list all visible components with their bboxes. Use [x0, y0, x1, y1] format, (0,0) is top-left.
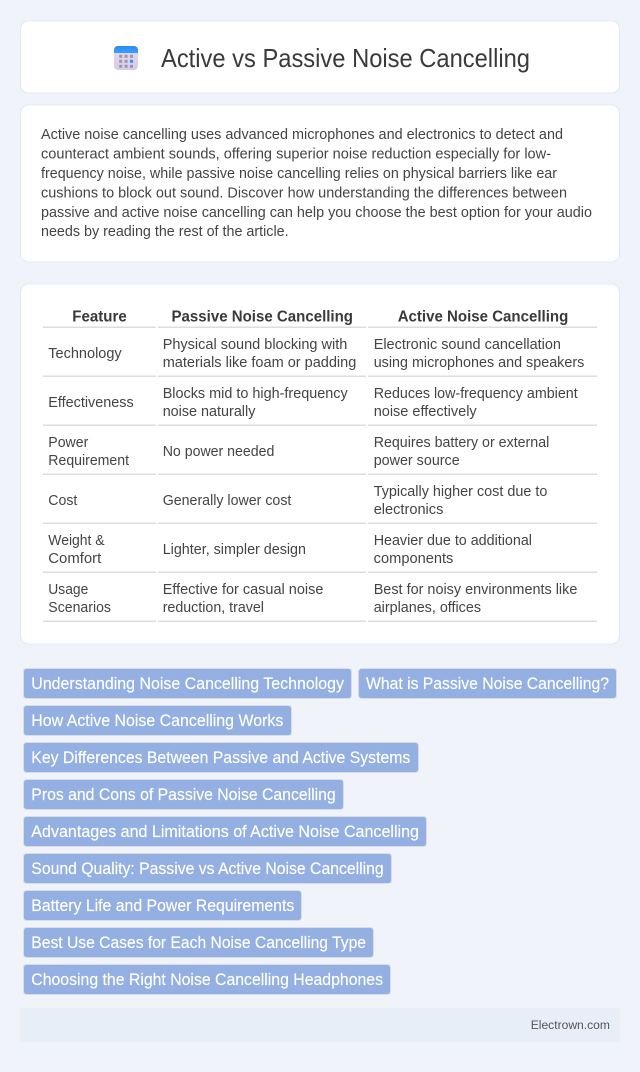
row: power requirement: Power	[48, 435, 88, 451]
row: cost: electronics	[374, 502, 443, 518]
tag: choosing: Choosing the Right Noise Cancelling Headphones	[31, 971, 383, 989]
panel: title card	[20, 21, 620, 93]
row: effectiveness: Effectiveness	[48, 395, 134, 411]
row: usage scenarios	[48, 582, 577, 616]
intro paragraph: Active noise cancelling uses advanced microphones and electronics to detect and	[41, 127, 563, 143]
tag: advantages: Advantages and Limitations of Active Noise Cancelling	[31, 823, 419, 841]
row: effectiveness: noise effectively	[374, 404, 477, 420]
tag: understanding	[24, 668, 352, 698]
tag: sound quality	[24, 854, 392, 884]
row: technology: Electronic sound cancellation	[374, 337, 561, 353]
row: effectiveness	[48, 386, 578, 420]
row: weight and comfort: Lighter, simpler design	[163, 542, 306, 558]
row: power requirement: power source	[374, 453, 460, 469]
row: power requirement: No power needed	[163, 444, 274, 460]
tag: differences: Key Differences Between Passive and Active Systems	[31, 749, 410, 767]
intro paragraph	[41, 127, 592, 240]
row: effectiveness: Reduces low-frequency ambient	[374, 386, 578, 402]
row: weight and comfort: Comfort	[48, 551, 101, 567]
row: power requirement: Requirement	[48, 453, 129, 469]
row: cost	[48, 484, 547, 518]
row: usage scenarios: airplanes, offices	[374, 600, 481, 616]
row: usage scenarios: reduction, travel	[163, 600, 264, 616]
tag: advantages	[24, 816, 426, 846]
tag: battery: Battery Life and Power Requirements	[31, 897, 294, 915]
table header: Passive Noise Cancelling	[172, 308, 353, 326]
tag: pros and cons: Pros and Cons of Passive Noise Cancelling	[31, 786, 336, 804]
row: technology: materials like foam or padding	[163, 355, 356, 371]
intro paragraph: needs by reading the rest of the article.	[41, 224, 289, 240]
panel: comparison table	[20, 284, 620, 644]
tag: battery	[24, 890, 302, 920]
row: usage scenarios: Usage	[48, 582, 88, 598]
row: technology: Technology	[48, 346, 122, 362]
row: power requirement	[48, 435, 549, 469]
table header	[72, 308, 568, 326]
tag: use cases: Best Use Cases for Each Noise Cancelling Type	[31, 934, 366, 952]
tag: differences	[24, 742, 418, 772]
row: technology: Physical sound blocking with	[163, 337, 347, 353]
row: effectiveness: Blocks mid to high-frequency	[163, 386, 348, 402]
tag: passive	[358, 668, 616, 698]
title: Active vs Passive Noise Cancelling	[161, 43, 530, 73]
tag: pros and cons	[24, 780, 344, 810]
row: cost: Cost	[48, 493, 77, 509]
row: usage scenarios: Scenarios	[48, 600, 111, 616]
intro paragraph: frequency noise, while passive noise cancelling relies on physical barriers like ear	[41, 166, 557, 182]
intro paragraph: counteract ambient sounds, offering superior noise reduction especially for low-	[41, 146, 551, 162]
tag: choosing	[24, 964, 390, 994]
tag: use cases	[24, 928, 374, 958]
row: weight and comfort: components	[374, 551, 453, 567]
row: usage scenarios: Best for noisy environments like	[374, 582, 577, 598]
panel: introduction	[20, 105, 620, 262]
topic tags	[24, 668, 616, 994]
row: weight and comfort: Heavier due to additional	[374, 533, 532, 549]
table header: Active Noise Cancelling	[398, 308, 568, 326]
tag: active	[24, 706, 292, 736]
row: usage scenarios: Effective for casual noise	[163, 582, 323, 598]
row: technology	[48, 337, 584, 371]
row: weight and comfort: Weight &	[48, 533, 105, 549]
row: weight and comfort	[48, 533, 532, 567]
row: effectiveness: noise naturally	[163, 404, 256, 420]
tag: passive: What is Passive Noise Cancelling?	[366, 675, 609, 693]
row: cost: Generally lower cost	[163, 493, 291, 509]
row: cost: Typically higher cost due to	[374, 484, 547, 500]
tag: sound quality: Sound Quality: Passive vs Active Noise Cancelling	[31, 860, 384, 878]
icon: calendar grid	[114, 46, 138, 70]
tag: active: How Active Noise Cancelling Works	[31, 712, 283, 730]
footer credit: Electrown.com	[531, 1018, 610, 1032]
tag: understanding: Understanding Noise Cancelling Technology	[31, 675, 345, 693]
intro paragraph: passive and active noise cancelling can help you choose the best option for your audio	[41, 205, 592, 221]
row: power requirement: Requires battery or external	[374, 435, 549, 451]
footer	[20, 1008, 620, 1042]
intro paragraph: cushions to block out sound. Discover how understanding the differences between	[41, 186, 567, 202]
table header: Feature	[72, 308, 127, 326]
row: technology: using microphones and speakers	[374, 355, 584, 371]
